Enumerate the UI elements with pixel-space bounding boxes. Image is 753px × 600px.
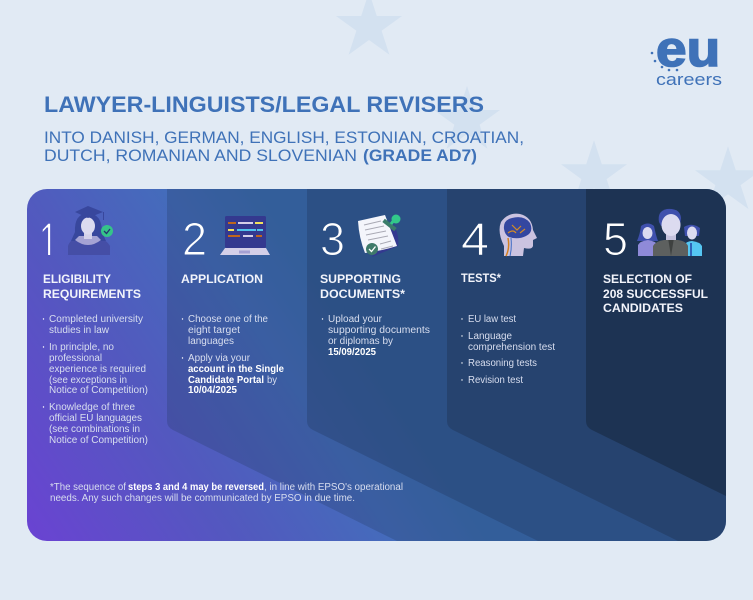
bullet list: Notice of Competition)	[49, 385, 148, 396]
bullet list: (see exceptions in	[49, 375, 127, 386]
heading: ELIGIBILITY	[43, 274, 111, 286]
bullet list: Knowledge of three	[49, 402, 135, 413]
footnote	[50, 482, 403, 504]
bullet list: professional	[49, 353, 102, 364]
icon: head with brain	[500, 214, 537, 256]
bullet list: or diplomas by	[328, 336, 393, 347]
footnote: needs. Any such changes will be communicated by EPSO in due time.	[50, 493, 355, 504]
icon: graduate	[68, 206, 113, 255]
bullet list: Upload your	[328, 314, 383, 325]
bullet list: eight target	[188, 325, 240, 336]
icon: document with stamp	[358, 214, 400, 257]
subtitle	[44, 129, 524, 165]
number 2: 2	[182, 213, 207, 265]
column band 4	[447, 189, 726, 541]
bullet list: languages	[188, 336, 234, 347]
heading: SELECTION OF	[603, 274, 692, 286]
subtitle: (GRADE AD7)	[363, 147, 477, 165]
heading: SUPPORTING	[320, 274, 401, 286]
icon: three people	[637, 209, 702, 256]
step 5: selection of candidates	[603, 209, 708, 315]
bullet list: (see combinations in	[49, 424, 140, 435]
footnote: , in line with EPSO's operational	[264, 482, 403, 493]
bullet list: by	[267, 375, 277, 386]
bullet list: 10/04/2025	[188, 385, 237, 396]
logo: EU careers: careers	[656, 70, 722, 89]
bullet list: Reasoning tests	[468, 358, 537, 369]
bullet list: official EU languages	[49, 413, 142, 424]
step 4: tests	[461, 213, 555, 386]
bullet list: account in the Single	[188, 364, 284, 375]
bullet list: Apply via your	[188, 353, 251, 364]
bullet list: Candidate Portal	[188, 375, 264, 386]
bullet list	[322, 314, 430, 358]
bullet list: Revision test	[468, 375, 523, 386]
background stars	[336, 0, 753, 209]
bullet list	[43, 314, 148, 446]
heading: APPLICATION	[181, 274, 263, 286]
heading	[320, 274, 406, 301]
number 4: 4	[461, 213, 489, 265]
heading	[43, 274, 141, 301]
footnote: steps 3 and 4 may be reversed	[128, 482, 264, 493]
step 1: eligibility requirements	[39, 206, 148, 446]
heading: TESTS*	[461, 273, 501, 285]
bullet list: studies in law	[49, 325, 110, 336]
heading: DOCUMENTS*	[320, 289, 406, 301]
title: LAWYER-LINGUISTS/LEGAL REVISERS	[44, 92, 484, 117]
bullet list: Choose one of the	[188, 314, 268, 325]
heading	[603, 274, 708, 315]
subtitle: DUTCH, ROMANIAN AND SLOVENIAN	[44, 147, 357, 165]
number 5: 5	[603, 213, 628, 265]
heading: 208 SUCCESSFUL	[603, 289, 708, 301]
bullet list: 15/09/2025	[328, 347, 376, 358]
bullet list: EU law test	[468, 314, 516, 325]
bullet list: Notice of Competition)	[49, 435, 148, 446]
subtitle: INTO DANISH, GERMAN, ENGLISH, ESTONIAN, CROATIAN,	[44, 129, 524, 147]
bullet list: Language	[468, 331, 512, 342]
logo: EU careers: eu	[656, 21, 720, 77]
heading: REQUIREMENTS	[43, 289, 141, 301]
bullet list	[461, 314, 555, 386]
column band 5	[586, 189, 726, 496]
bullet list: Completed university	[49, 314, 143, 325]
column band 3	[307, 189, 726, 541]
step 3: supporting documents	[320, 213, 430, 358]
panel: steps background	[27, 189, 726, 541]
bullet list: experience is required	[49, 364, 146, 375]
heading: CANDIDATES	[603, 303, 683, 315]
step 2: application	[181, 213, 284, 396]
bullet list	[182, 314, 284, 396]
bullet list: comprehension test	[468, 342, 555, 353]
icon: laptop	[220, 216, 270, 255]
number 3: 3	[320, 213, 345, 265]
column band 2	[167, 189, 726, 541]
bullet list: supporting documents	[328, 325, 430, 336]
footnote: *The sequence of	[50, 482, 126, 493]
bullet list: In principle, no	[49, 342, 114, 353]
number 1: 1	[39, 213, 58, 271]
